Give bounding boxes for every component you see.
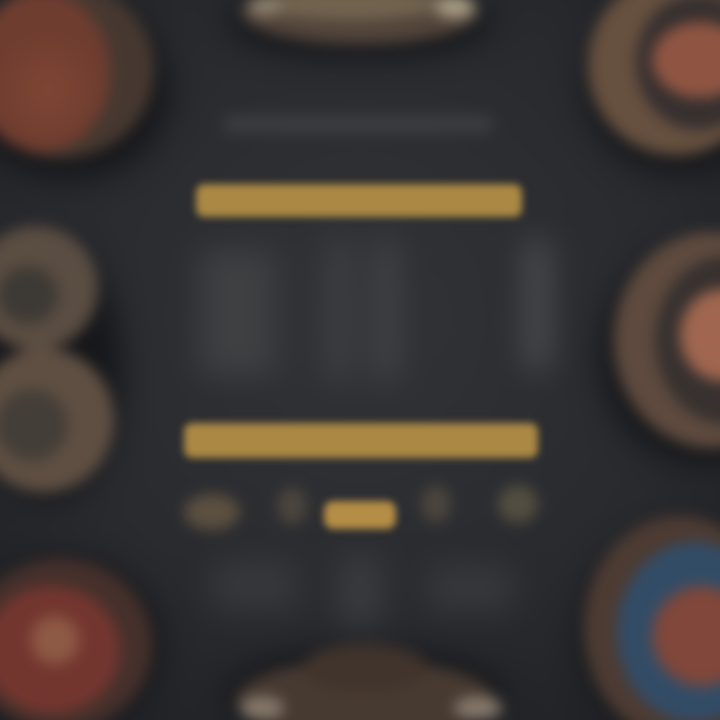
- icon: left badge: [184, 494, 240, 530]
- title: [224, 115, 492, 133]
- icon: second badge: [277, 487, 307, 525]
- plate: top right: [588, 0, 720, 155]
- knots: left middle: [0, 226, 114, 492]
- icon row: [184, 485, 538, 530]
- plate: top centre: [242, 0, 478, 44]
- gold centre badge: [324, 501, 396, 529]
- gold heading bar: top: [196, 184, 522, 217]
- plate: right middle: [614, 232, 720, 448]
- plate: top left: [0, 0, 154, 158]
- plate: bottom centre: [237, 644, 502, 720]
- icon: fourth badge: [421, 485, 451, 523]
- lower text panel: [212, 555, 513, 625]
- plate: bottom right: [584, 516, 720, 720]
- plate: bottom left: [0, 559, 152, 720]
- table panel: [200, 240, 549, 380]
- icon: right badge: [498, 485, 538, 523]
- gold heading bar: bottom: [184, 423, 538, 458]
